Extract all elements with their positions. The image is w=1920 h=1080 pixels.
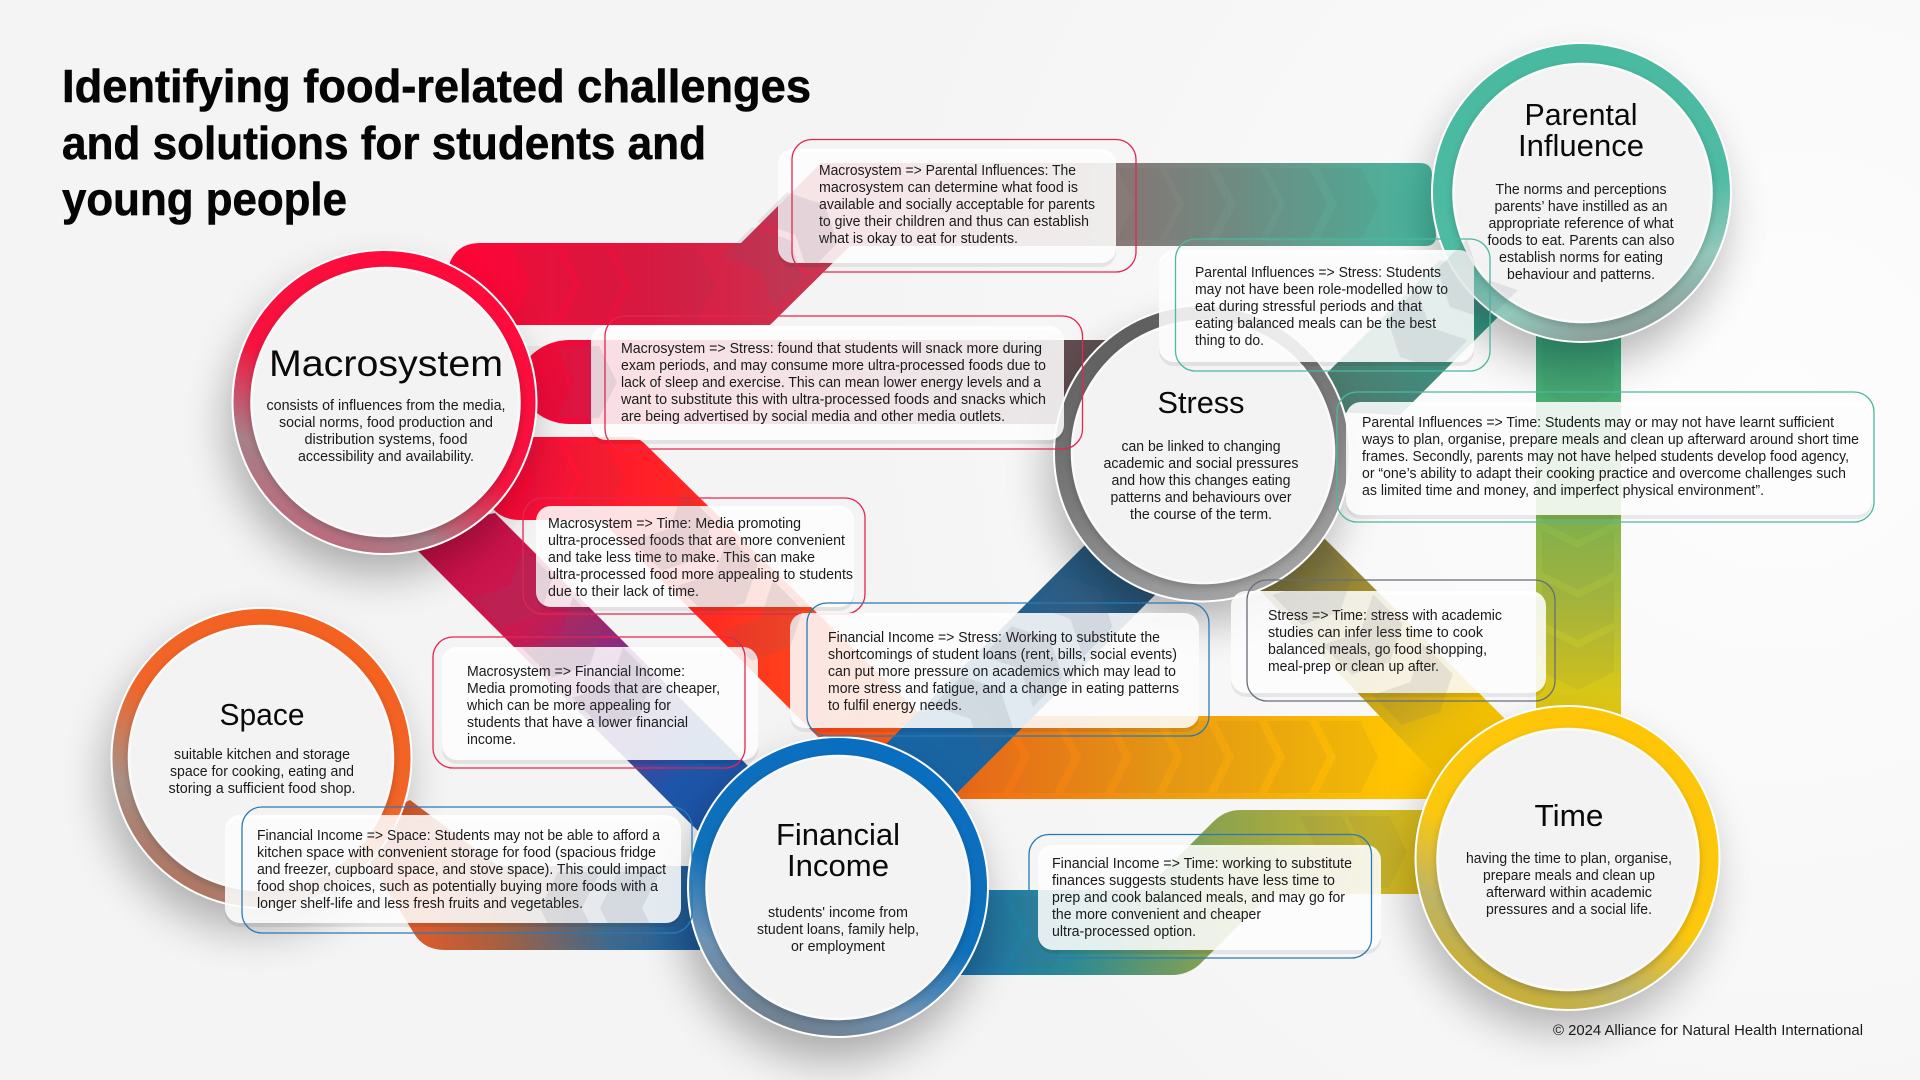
circle: Space — [105, 608, 412, 930]
callout: Macrosystem to Financial Income: Macrosystem => Financial Income: — [467, 664, 685, 680]
heading: Financial Income: Income — [787, 848, 889, 883]
heading: Stress: Stress — [1158, 385, 1244, 420]
callout: Financial Income to Time: finances suggests students have less time to — [1052, 873, 1335, 889]
callout: Macrosystem to Stress: want to substitute this with ultra-processed foods and snacks which — [620, 392, 1046, 408]
connector: Financial Income to Space — [350, 800, 700, 950]
circle: Macrosystem — [228, 250, 536, 574]
callout: Financial Income to Time: ultra-processed option. — [1052, 924, 1196, 940]
connector: Stress to Time — [1250, 534, 1520, 790]
inner disc: Financial Income — [706, 756, 970, 1019]
description: Parental Influence — [1488, 182, 1674, 283]
callout: Macrosystem to Stress: lack of sleep and exercise. This can mean lower energy levels and a — [621, 375, 1042, 391]
description: Time: afterward within academic — [1486, 885, 1652, 901]
callout: Parental Influences to Time: or “one’s ability to adapt their cooking practice and overcome challenges such — [1362, 466, 1846, 482]
title — [62, 60, 811, 225]
connector: Macrosystem to Parental Influence — [440, 163, 1436, 325]
ring: Time — [1416, 706, 1720, 1010]
ring: Space — [112, 608, 412, 908]
description: Stress: can be linked to changing — [1122, 439, 1280, 455]
callout: Financial Income to Time — [1029, 834, 1381, 958]
description: Space: suitable kitchen and storage — [174, 747, 350, 763]
heading: Parental Influence: Influence — [1518, 128, 1644, 163]
callout: Parental Influences to Stress: Parental Influences => Stress: Students — [1195, 265, 1441, 281]
callout: Stress to Time: balanced meals, go food shopping, — [1268, 642, 1487, 658]
circle: Parental Influence — [1428, 43, 1731, 364]
callout: Macrosystem to Financial Income — [433, 637, 758, 768]
description: Macrosystem: distribution systems, food — [304, 432, 468, 448]
heading: Time: Time — [1534, 798, 1604, 833]
callout: Parental Influences to Time: Parental Influences => Time: Students may or may not have learnt sufficient — [1362, 415, 1834, 431]
description: Financial Income: students' income from — [768, 905, 908, 921]
description: Financial Income: or employment — [791, 939, 885, 955]
callout: Macrosystem to Stress: exam periods, and may consume more ultra-processed foods due to — [621, 358, 1046, 374]
callout: Macrosystem to Stress — [591, 316, 1082, 449]
connector: Parental Influence to Time — [1536, 308, 1621, 730]
inner disc: Time — [1438, 729, 1698, 990]
callout: Financial Income to Stress: can put more pressure on academics which may lead to — [828, 664, 1176, 680]
inner disc: Stress — [1072, 321, 1334, 583]
ring: Macrosystem — [232, 250, 536, 554]
description: Financial Income: student loans, family help, — [757, 922, 919, 938]
connector: Financial Income to Time — [960, 810, 1445, 975]
connector: Macrosystem to Time — [490, 437, 1485, 799]
callout: Macrosystem to Time: Macrosystem => Time: Media promoting — [548, 516, 801, 532]
callout: Macrosystem to Financial Income: which can be more appealing for — [466, 698, 671, 714]
callout: Macrosystem to Time: due to their lack of time. — [548, 584, 699, 600]
description: Macrosystem: consists of influences from the media, — [266, 398, 506, 414]
callout: Financial Income to Space: and freezer, cupboard space, and stove space). This could impact — [257, 862, 666, 878]
callout: Parental Influences to Time: ways to plan, organise, prepare meals and clean up afterward around short time — [1361, 432, 1859, 448]
callout: Financial Income to Space: Financial Income => Space: Students may not be able to afford a — [257, 828, 661, 844]
callout: Macrosystem to Stress: Macrosystem => Stress: found that students will snack more during — [621, 341, 1042, 357]
heading: Financial Income — [776, 817, 900, 883]
circle: Time — [1412, 706, 1720, 1030]
description: Parental Influence: appropriate reference of what — [1488, 216, 1674, 232]
connector: Macrosystem to Financial Income — [400, 513, 800, 853]
description: Time: pressures and a social life. — [1486, 902, 1652, 918]
description: Space — [168, 747, 356, 797]
description: Time: having the time to plan, organise, — [1466, 851, 1672, 867]
callout: Financial Income to Time: Financial Income => Time: working to substitute — [1052, 856, 1352, 872]
callout: Macrosystem to Parental Influences: to give their children and thus can establish — [819, 214, 1089, 230]
ring: Stress — [1054, 306, 1350, 602]
description: Parental Influence: parents’ have instilled as an — [1494, 199, 1668, 215]
callout: Macrosystem to Financial Income: students that have a lower financial — [467, 715, 688, 731]
title: Identifying food-related challenges — [62, 60, 811, 112]
callout: Macrosystem to Financial Income: Media promoting foods that are cheaper, — [467, 681, 720, 697]
description: Macrosystem: social norms, food production and — [279, 415, 493, 431]
connector: Macrosystem to Stress — [517, 340, 1110, 424]
callout: Financial Income to Stress: shortcomings of student loans (rent, bills, social events) — [828, 647, 1177, 663]
callout: Parental Influences to Stress: eating balanced meals can be the best — [1195, 316, 1436, 332]
inner disc: Space — [129, 626, 393, 890]
description: Parental Influence: foods to eat. Parents can also — [1488, 233, 1674, 249]
description: Macrosystem — [266, 398, 506, 465]
connector: Financial Income to Stress — [840, 510, 1240, 810]
description: Financial Income — [757, 905, 919, 955]
callout: Parental Influences to Time: frames. Secondly, parents may not have helped students develop food agency, — [1362, 449, 1849, 465]
callout: Financial Income to Stress: more stress and fatigue, and a change in eating patterns — [828, 681, 1179, 697]
description: Stress — [1104, 439, 1298, 523]
description: Parental Influence: establish norms for eating — [1499, 250, 1663, 266]
callout: Financial Income to Stress: Financial Income => Stress: Working to substitute the — [828, 630, 1160, 646]
heading: Parental Influence — [1518, 97, 1644, 163]
description: Space: space for cooking, eating and — [170, 764, 354, 780]
callout: Financial Income to Space: food shop choices, such as potentially buying more foods with a — [257, 879, 659, 895]
title: and solutions for students and — [62, 117, 706, 169]
callout: Financial Income to Space: kitchen space with convenient storage for food (spacious fridge — [257, 845, 656, 861]
callout: Parental Influences to Stress: thing to do. — [1195, 333, 1264, 349]
description: Time — [1466, 851, 1672, 918]
callout: Macrosystem to Parental Influences: available and socially acceptable for parents — [819, 197, 1095, 213]
callout: Stress to Time — [1231, 580, 1555, 701]
callout: Parental Influences to Stress — [1159, 239, 1490, 371]
callout: Macrosystem to Stress: are being advertised by social media and other media outlets. — [621, 409, 1005, 425]
ring: Parental Influence — [1432, 43, 1731, 342]
callout: Macrosystem to Time — [523, 498, 865, 614]
description: Space: storing a sufficient food shop. — [168, 781, 356, 797]
callout: Financial Income to Time: prep and cook balanced meals, and may go for — [1052, 890, 1345, 906]
ring: Financial Income — [688, 737, 988, 1037]
inner disc: Parental Influence — [1454, 64, 1712, 322]
callout: Financial Income to Time: the more convenient and cheaper — [1052, 907, 1261, 923]
description: Stress: patterns and behaviours over — [1110, 490, 1292, 506]
circle: Stress — [1049, 306, 1350, 623]
callout: Stress to Time: Stress => Time: stress with academic — [1268, 608, 1502, 624]
callout: Stress to Time: meal-prep or clean up after. — [1268, 659, 1439, 675]
heading: Macrosystem: Macrosystem — [269, 343, 503, 384]
callout: Macrosystem to Parental Influences: macrosystem can determine what food is — [819, 180, 1078, 196]
callout: Stress to Time: studies can infer less time to cook — [1268, 625, 1484, 641]
description: Macrosystem: accessibility and availability. — [298, 449, 474, 465]
callout: Macrosystem to Time: ultra-processed foods that are more convenient — [548, 533, 845, 549]
callout: Macrosystem to Time: ultra-processed food more appealing to students — [548, 567, 853, 583]
callout: Macrosystem to Parental Influences: what is okay to eat for students. — [818, 231, 1018, 247]
description: Time: prepare meals and clean up — [1483, 868, 1655, 884]
heading: Financial Income: Financial — [776, 817, 900, 852]
callout: Macrosystem to Financial Income: income. — [467, 732, 516, 748]
connector: Parental Influence to Stress — [1290, 260, 1530, 415]
callout: Financial Income to Stress — [790, 603, 1209, 736]
heading: Parental Influence: Parental — [1524, 97, 1638, 132]
callout: Parental Influences to Stress: eat during stressful periods and that — [1195, 299, 1422, 315]
description: Stress: and how this changes eating — [1112, 473, 1290, 489]
description: Parental Influence: The norms and perceptions — [1496, 182, 1666, 198]
callout: Macrosystem to Time: and take less time to make. This can make — [548, 550, 815, 566]
callout: Financial Income to Stress: to fulfil energy needs. — [828, 698, 962, 714]
callout: Financial Income to Space — [225, 807, 692, 933]
heading: Space: Space — [220, 697, 304, 732]
callout: Parental Influences to Time: as limited time and money, and imperfect physical environment”. — [1362, 483, 1764, 499]
circle: Financial Income — [682, 737, 988, 1060]
title: young people — [62, 173, 347, 225]
description: Stress: the course of the term. — [1130, 507, 1272, 523]
callout: Parental Influences to Time — [1337, 392, 1874, 522]
description: Stress: academic and social pressures — [1104, 456, 1298, 472]
copyright: © 2024 Alliance for Natural Health International — [1553, 1023, 1863, 1039]
description: Parental Influence: behaviour and patterns. — [1507, 267, 1655, 283]
inner disc: Macrosystem — [252, 268, 520, 536]
callout: Financial Income to Space: longer shelf-life and less fresh fruits and vegetables. — [257, 896, 583, 912]
callout: Macrosystem to Parental Influences — [778, 140, 1136, 272]
callout: Parental Influences to Stress: may not have been role-modelled how to — [1195, 282, 1448, 298]
callout: Macrosystem to Parental Influences: Macrosystem => Parental Influences: The — [819, 163, 1076, 179]
